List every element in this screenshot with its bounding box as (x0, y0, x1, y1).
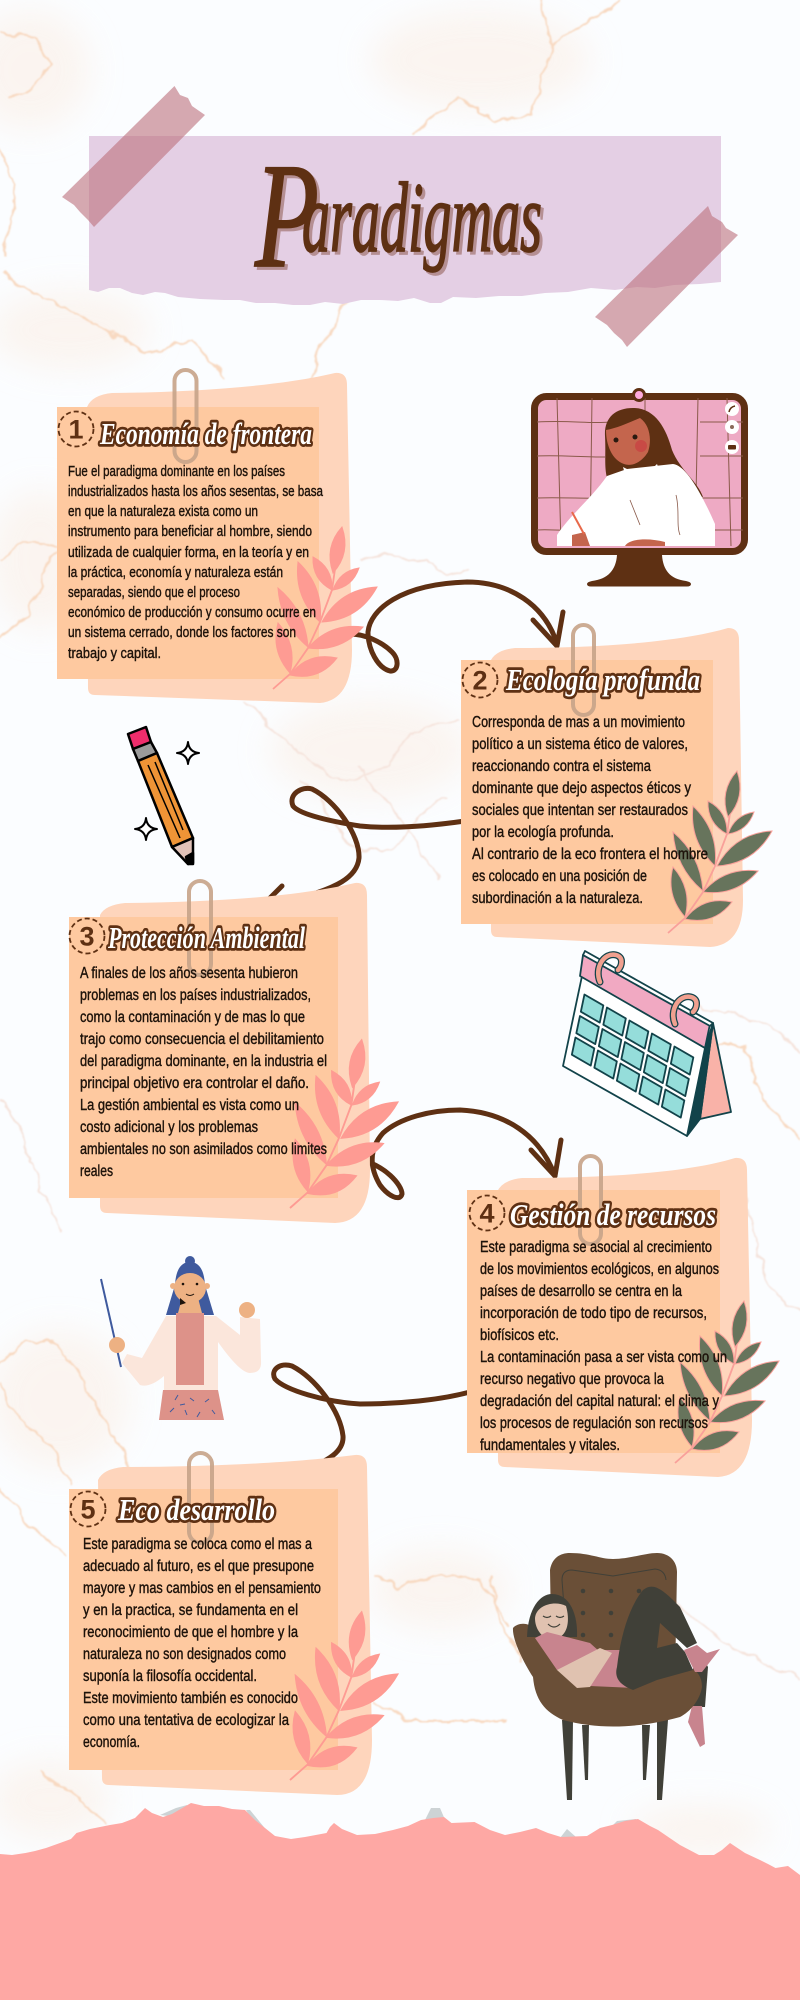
heading 3: Protección Ambiental (107, 920, 305, 955)
body text 2: dominante que dejo aspectos éticos y (472, 780, 691, 797)
note front (467, 1190, 720, 1453)
number 2 (462, 662, 498, 698)
paper clip (189, 881, 211, 975)
body text 2 (472, 714, 708, 907)
body text 5 (83, 1536, 321, 1751)
paper back (100, 883, 370, 1223)
body text 2: subordinación a la naturaleza. (472, 890, 643, 907)
body text 5: suponía la filosofía occidental. (83, 1668, 257, 1685)
heading 1: Economía de frontera (99, 416, 312, 451)
heading: Paradigmas (254, 133, 545, 302)
panel 5: Eco desarrollo (69, 1453, 398, 1795)
paper back (98, 1455, 372, 1795)
torn pink paper footer (0, 1803, 800, 2000)
icon: pencil with sparkles (128, 727, 199, 864)
note front (69, 917, 338, 1198)
body text 2: Corresponda de mas a un movimiento (472, 714, 685, 731)
paper clip (174, 370, 196, 462)
body text 1: la práctica, economía y naturaleza están (68, 564, 283, 581)
body text 3: principal objetivo era controlar el daño. (80, 1075, 309, 1092)
body text 2: por la ecología profunda. (472, 824, 614, 841)
body text 2: político a un sistema ético de valores, (472, 736, 688, 753)
body text 4 (480, 1239, 727, 1454)
paper clip (189, 1453, 212, 1543)
tape right (595, 206, 738, 347)
body text 3: reales (80, 1163, 113, 1180)
body text 5: Este movimiento también es conocido (83, 1690, 298, 1707)
illustration: teacher with pointer (101, 1256, 261, 1420)
icon: monitor with woman on video call (534, 390, 744, 586)
body text 3: A finales de los años sesenta hubieron (80, 965, 298, 982)
leaf branch (675, 1301, 779, 1463)
body text 1: en que la naturaleza exista como un (68, 503, 258, 520)
paper back (87, 373, 352, 703)
body text 4: recurso negativo que provoca la (480, 1371, 664, 1388)
body text 1 (68, 463, 323, 662)
body text 4: incorporación de todo tipo de recursos, (480, 1305, 707, 1322)
body text 4: de los movimientos ecológicos, en algunos (480, 1261, 719, 1278)
body text 3: como la contaminación y de mas lo que (80, 1009, 305, 1026)
body text 4: degradación del capital natural: el clima y (480, 1393, 719, 1410)
body text 2: reaccionando contra el sistema (472, 758, 651, 775)
leaf branch (290, 1612, 398, 1780)
paper back (497, 1158, 752, 1477)
body text 3: costo adicional y los problemas (80, 1119, 258, 1136)
number 5: 5 (80, 1494, 96, 1524)
note front (57, 407, 319, 679)
body text 5: economía. (83, 1734, 140, 1751)
body text 5: adecuado al futuro, es el que presupone (83, 1558, 314, 1575)
body text 1: separadas, siendo que el proceso (68, 584, 240, 601)
body text 3: ambientales no son asimilados como limites (80, 1141, 327, 1158)
body text 5: mayore y mas cambios en el pensamiento (83, 1580, 321, 1597)
body text 5: naturaleza no son designados como (83, 1646, 286, 1663)
body text 5: y en la practica, se fundamenta en el (83, 1602, 298, 1619)
number 5 (70, 1492, 106, 1526)
paper clip (573, 625, 594, 715)
panel 1: Economía de frontera (57, 370, 377, 703)
heading: Paradigmas: P (254, 133, 319, 299)
title banner (62, 86, 738, 347)
illustration: woman resting in armchair (513, 1553, 720, 1800)
body text 4: fundamentales y vitales. (480, 1437, 620, 1454)
body text 4: Este paradigma se asocial al crecimiento (480, 1239, 712, 1256)
torn edge fill (0, 1803, 800, 2000)
body text 4: países de desarrollo se centra en la (480, 1283, 682, 1300)
leaf branch (668, 771, 772, 933)
body text 1: utilizada de cualquier forma, en la teoría y en (68, 544, 309, 561)
body text 3: trajo como consecuencia el debilitamiento (80, 1031, 324, 1048)
panel 3: Protección Ambiental (69, 881, 398, 1223)
paper clip (580, 1156, 601, 1244)
arrow: 4 to 5 (256, 1365, 470, 1473)
body text 1: trabajo y capital. (68, 645, 161, 662)
panel 4: Gestión de recursos (467, 1156, 779, 1477)
body text 3: La gestión ambiental es vista como un (80, 1097, 299, 1114)
body text 2: sociales que intentan ser restaurados (472, 802, 688, 819)
body text 1: económico de producción y consumo ocurre en (68, 604, 316, 621)
note front (461, 660, 713, 924)
number 4: 4 (479, 1198, 495, 1228)
body text 3 (80, 965, 327, 1180)
arrow: 3 to 4 (360, 1110, 561, 1198)
body text 4: La contaminación pasa a ser vista como un (480, 1349, 727, 1366)
body text 3: del paradigma dominante, en la industria el (80, 1053, 327, 1070)
heading: Paradigmas: aradigmas (302, 162, 542, 273)
torn lilac panel (89, 136, 721, 305)
leaf branch (273, 527, 377, 689)
body text 4: biofísicos etc. (480, 1327, 559, 1344)
number 1: 1 (68, 414, 84, 444)
body text 5: como una tentativa de ecologizar la (83, 1712, 289, 1729)
number 3 (70, 918, 104, 954)
paper back (490, 628, 743, 947)
heading 5: Eco desarrollo (117, 1492, 275, 1527)
body text 2: Al contrario de la eco frontera el hombre (472, 846, 708, 863)
number 3: 3 (79, 922, 95, 952)
body text 1: Fue el paradigma dominante en los países (68, 463, 285, 480)
body text 3: problemas en los países industrializados, (80, 987, 311, 1004)
body text 5: reconocimiento de que el hombre y la (83, 1624, 298, 1641)
heading 2: Ecología profunda (505, 662, 700, 697)
heading: Paradigmas: P (257, 136, 322, 302)
number 4 (470, 1196, 504, 1230)
number 1 (58, 412, 94, 446)
body text 1: un sistema cerrado, donde los factores son (68, 624, 296, 641)
body text 5: Este paradigma se coloca como el mas a (83, 1536, 312, 1553)
number 2: 2 (472, 666, 488, 696)
tape left (62, 86, 205, 227)
arrow: 2 to 3 (268, 788, 465, 900)
body text 1: industrializados hasta los años sesentas, se basa (68, 483, 323, 500)
arrow: 1 to 2 (350, 582, 563, 671)
note front (69, 1489, 338, 1770)
heading: Paradigmas: aradigmas (305, 165, 545, 276)
heading 4: Gestión de recursos (510, 1197, 716, 1232)
panel 2: Ecología profunda (461, 625, 772, 947)
body text 2: es colocado en una posición de (472, 868, 647, 885)
leaf branch (290, 1040, 398, 1208)
body text 1: instrumento para beneficiar al hombre, siendo (68, 523, 312, 540)
icon: desk calendar (563, 951, 731, 1136)
body text 4: los procesos de regulación son recursos (480, 1415, 708, 1432)
